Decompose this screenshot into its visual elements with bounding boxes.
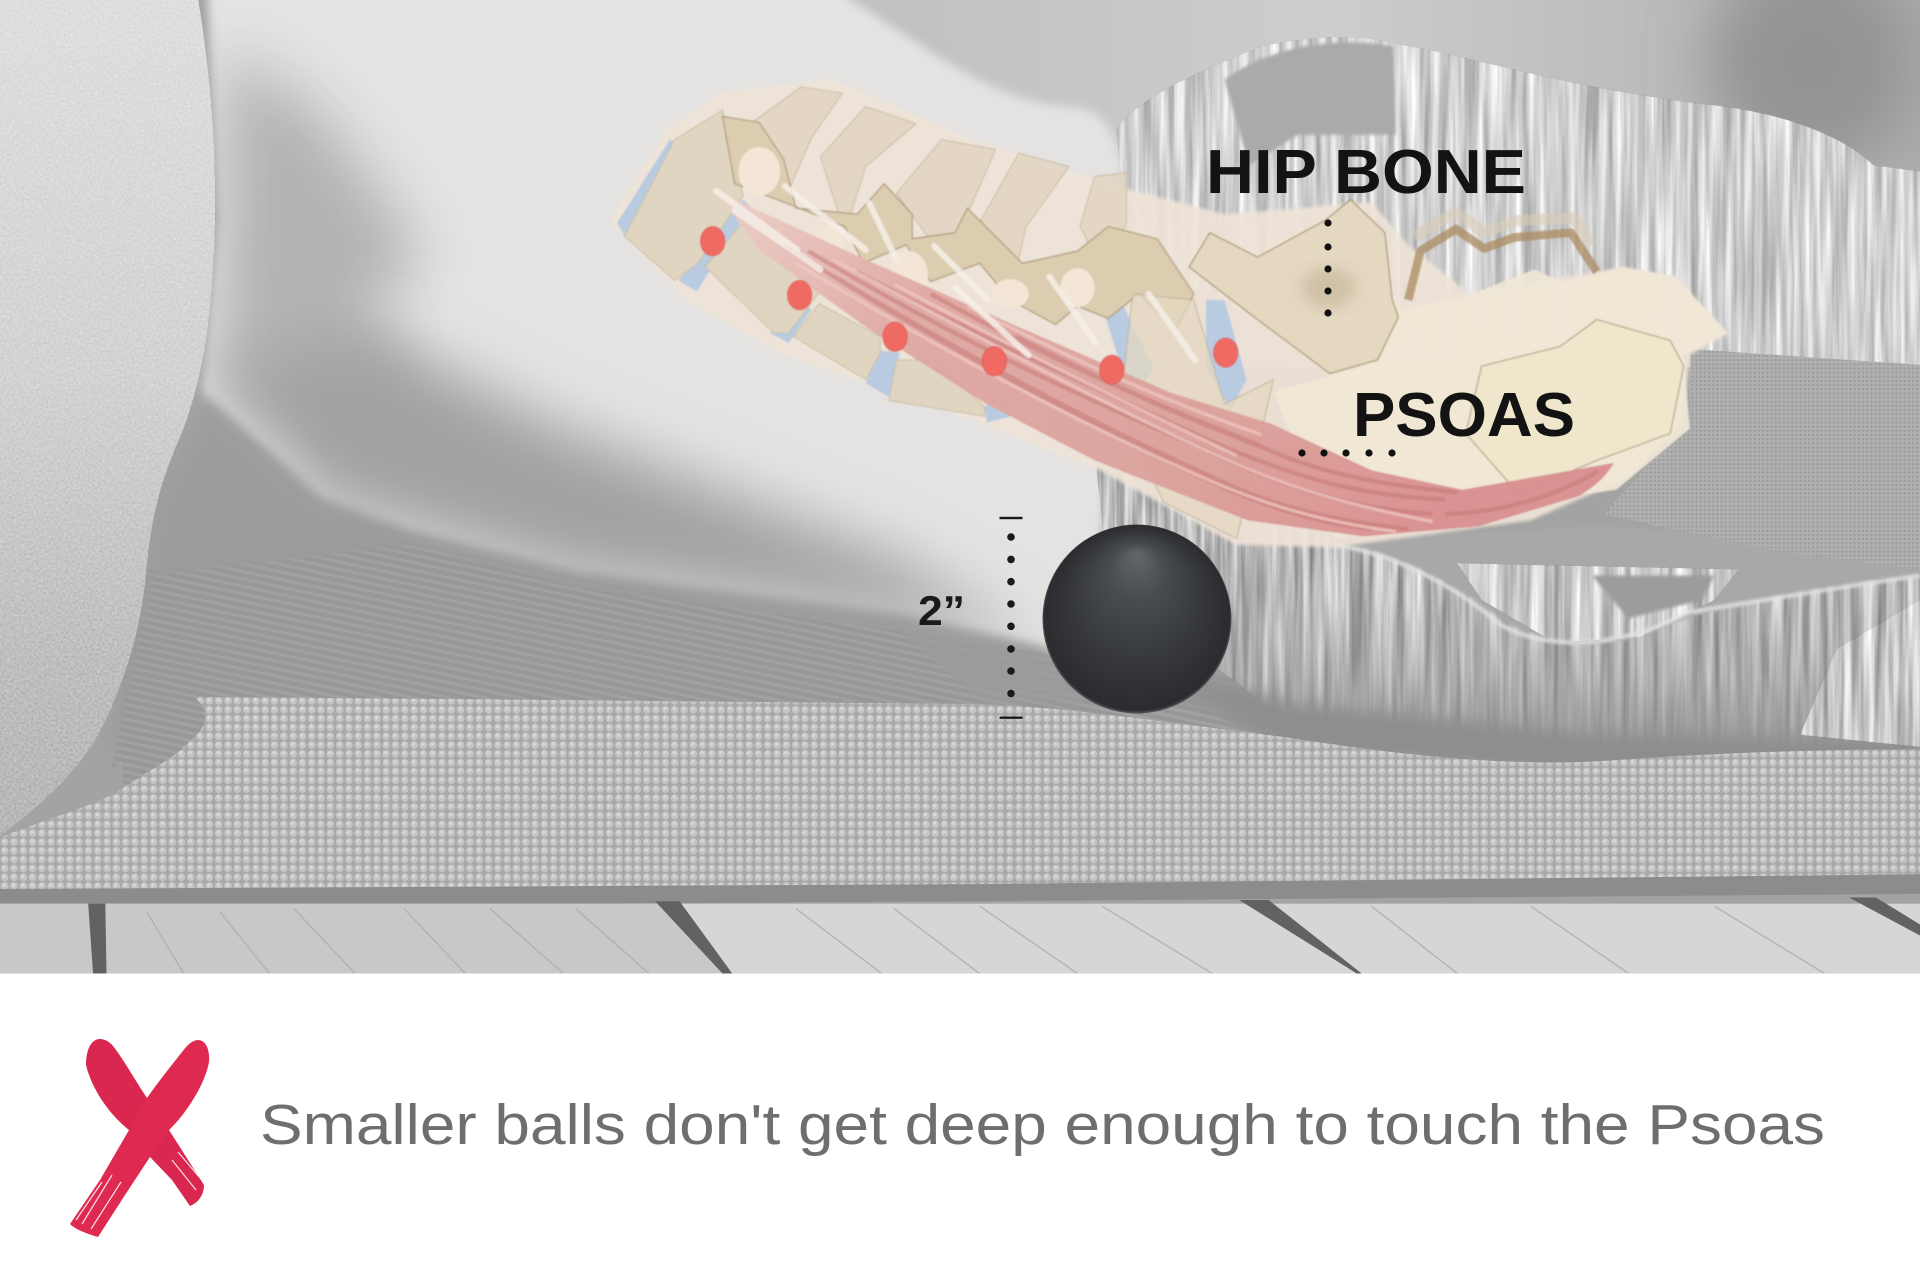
- label: ball size: 2”: [918, 587, 965, 634]
- label: psoas: PSOAS: [1353, 381, 1575, 450]
- yoga mat top surface: [0, 697, 1920, 891]
- leg on the left: [0, 0, 215, 836]
- mat side edge: [0, 874, 1920, 907]
- crest highlight: [1414, 212, 1592, 245]
- pale muscle fibres: [796, 260, 1433, 531]
- torso lower shadow: [208, 331, 1041, 650]
- dark inner fold: [1592, 576, 1714, 618]
- shorts lower shadow fade: [1195, 568, 1920, 749]
- hip bone shading: [1302, 268, 1356, 307]
- stroke top-left to bottom-right: [86, 1039, 204, 1206]
- tendons: [716, 186, 1195, 360]
- shadow beneath hips: [1198, 684, 1914, 762]
- label: hip bone: HIP BONE: [1206, 138, 1526, 207]
- femur head: [1466, 320, 1684, 493]
- hip bone: [1189, 200, 1398, 373]
- spinous processes: [751, 87, 1127, 269]
- photo base tone: [0, 0, 1920, 973]
- discs: [617, 140, 1247, 422]
- grain: [147, 906, 1825, 973]
- vertebral bodies: [624, 110, 984, 416]
- dark trees top right: [1708, 0, 1916, 171]
- light fold at right: [1800, 600, 1920, 747]
- dimension ruler: [1000, 517, 1022, 719]
- shorts waistband patch: [1224, 42, 1396, 165]
- floor shadow under body: [248, 436, 1044, 650]
- gaps: [88, 898, 1920, 973]
- shorts lower: [1096, 465, 1920, 749]
- psoas muscle: [716, 186, 1614, 536]
- muscle belly: [716, 191, 1614, 536]
- lower vertebra and sacrum: [1120, 294, 1273, 539]
- dotted leader: psoas: [1298, 449, 1396, 457]
- dotted leader: hip bone: [1324, 219, 1332, 317]
- foramen openings: [738, 147, 1095, 309]
- shorts crease: [1359, 538, 1914, 645]
- icon: red brush X: [70, 1039, 209, 1237]
- grey mesh panel: [1604, 349, 1920, 569]
- hip crest: [1408, 229, 1597, 300]
- brush bristles: [76, 1152, 200, 1229]
- ribbed mat behind body: [122, 702, 1252, 784]
- stroke top-right to bottom-left: [70, 1040, 209, 1237]
- warm wash: [610, 80, 1728, 547]
- shorts upper: [1117, 37, 1920, 380]
- ribbed mat lower band: [112, 753, 122, 768]
- caption: Smaller balls don't get deep enough to touch the Psoas: [260, 1093, 1825, 1157]
- blurred background behind the figure: [848, 0, 1920, 172]
- photo scene: [0, 0, 1920, 973]
- torso: [202, 0, 1124, 655]
- torso upper shadow: [220, 49, 422, 404]
- pelvis: [1273, 267, 1728, 539]
- left plank tint: [0, 904, 722, 973]
- shorts crease highlight: [1335, 545, 1920, 643]
- pain points: [700, 227, 1238, 384]
- articular facets: [722, 116, 1194, 331]
- anatomical overlay: [610, 80, 1728, 547]
- light folds in lower shorts: [1457, 563, 1739, 643]
- muscle fibres: [784, 245, 1598, 529]
- planks: [0, 904, 1920, 973]
- wood deck: [0, 898, 1920, 973]
- ball: [1042, 524, 1232, 714]
